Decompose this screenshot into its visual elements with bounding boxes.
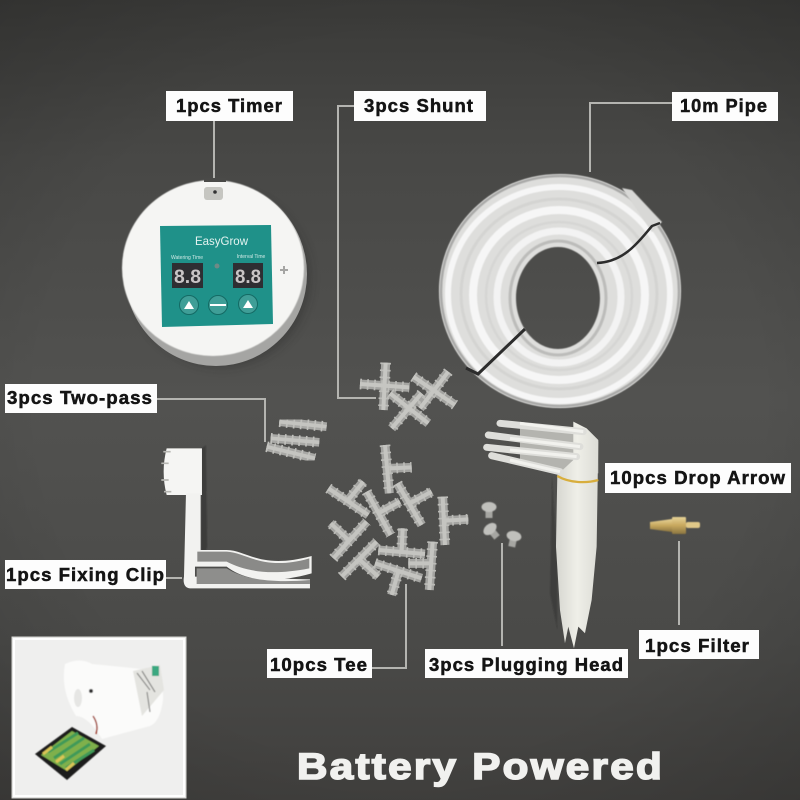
drop arrows bundle <box>487 422 598 648</box>
tee connectors <box>328 445 468 595</box>
icon: coiled pipe <box>439 174 681 408</box>
label: 10m Pipe: 10m Pipe <box>680 96 768 116</box>
wire tie top <box>597 223 660 263</box>
wire tie bottom <box>466 329 525 374</box>
icon: round timer unit <box>122 178 310 367</box>
two-pass leader line <box>157 399 265 442</box>
icon: fixing clip <box>161 445 312 588</box>
label: 10m Pipe <box>672 92 778 121</box>
two-pass connectors <box>267 422 327 458</box>
timer teal control panel <box>160 225 273 327</box>
label: 1pcs Fixing Clip: 1pcs Fixing Clip <box>6 565 165 585</box>
brand name: EasyGrow <box>195 234 248 248</box>
red wires <box>93 716 97 734</box>
timer leader line <box>213 121 215 184</box>
label: 3pcs Plugging Head <box>425 649 628 678</box>
small caption: interval time: Interval Time <box>237 254 266 260</box>
timer top notch <box>204 178 226 200</box>
battery case <box>35 727 106 780</box>
icon: brass filter <box>650 517 700 534</box>
left digital display: 8.8 <box>174 267 201 288</box>
right digital display: 8.8 <box>235 267 261 288</box>
label: 10pcs Drop Arrow: 10pcs Drop Arrow <box>610 468 786 488</box>
label: 1pcs Fixing Clip <box>5 560 166 589</box>
label: 1pcs Filter: 1pcs Filter <box>645 636 750 656</box>
small caption: watering time: Watering Time <box>171 255 203 261</box>
plugging heads <box>481 502 522 548</box>
label: 3pcs Shunt <box>354 91 486 121</box>
tee leader line <box>372 584 406 668</box>
label: 1pcs Timer: 1pcs Timer <box>176 96 283 116</box>
pipe leader line <box>590 103 672 172</box>
label: 10pcs Drop Arrow <box>605 463 791 493</box>
product label <box>133 665 164 716</box>
fixing clip leader line <box>166 577 182 579</box>
label: 3pcs Shunt: 3pcs Shunt <box>364 96 474 116</box>
shunt connectors <box>360 363 455 428</box>
label: 1pcs Filter <box>639 630 759 659</box>
inset photo: battery pack <box>12 637 186 798</box>
label: 1pcs Timer <box>166 91 293 121</box>
label: 10pcs Tee: 10pcs Tee <box>270 655 368 675</box>
heading: Battery Powered: Battery Powered <box>297 746 664 787</box>
plugging head leader line <box>501 543 503 646</box>
label: 3pcs Two-pass: 3pcs Two-pass <box>7 388 153 408</box>
label: 3pcs Two-pass <box>5 384 157 413</box>
label: 3pcs Plugging Head: 3pcs Plugging Head <box>429 655 624 675</box>
yellow rubber band <box>557 476 598 482</box>
control buttons <box>180 294 258 314</box>
label: 10pcs Tee <box>267 649 372 678</box>
white cylinder body <box>64 660 163 739</box>
shunt leader line <box>338 106 376 398</box>
filter leader line <box>678 541 680 625</box>
